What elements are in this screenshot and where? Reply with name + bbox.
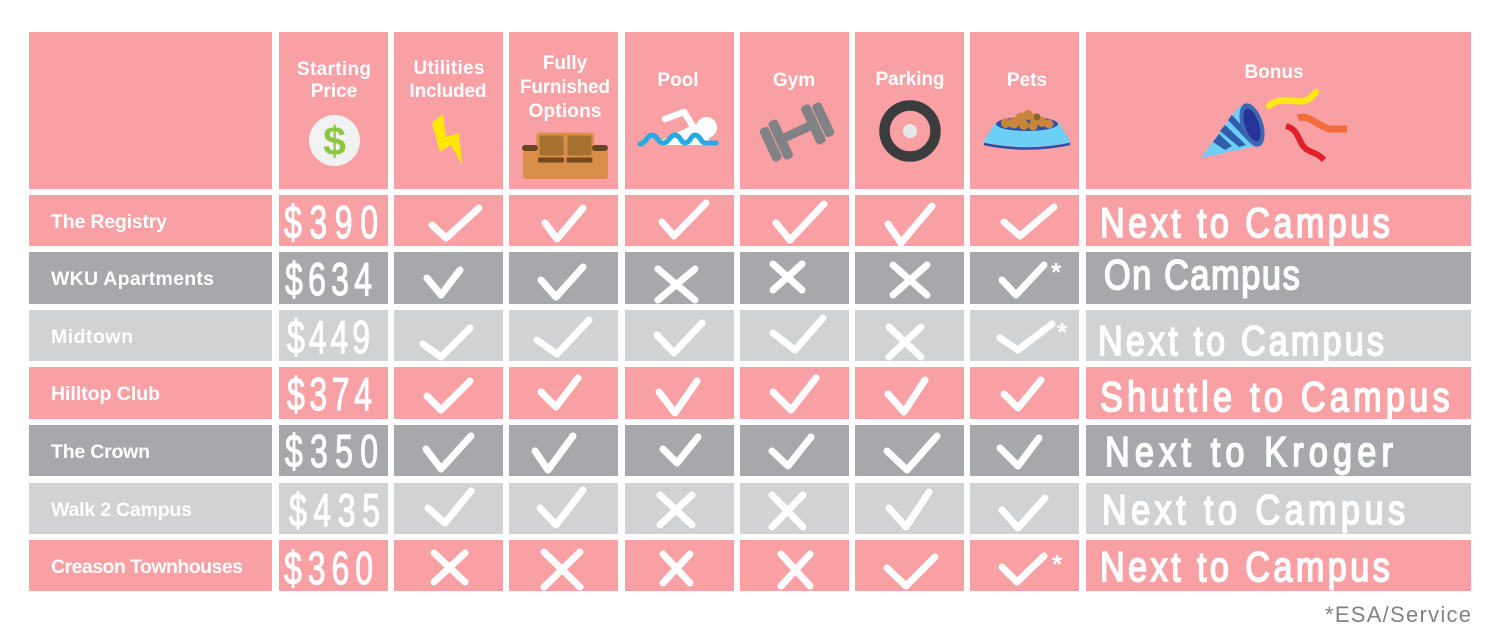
row: WKU Apartments: WKU Apartments [51,268,214,290]
column: gym: Gym [773,70,815,91]
marks: WKU Apartments [427,264,1044,300]
marks: The Registry [432,203,1054,243]
column: fully furnished options [509,32,618,189]
row: Creason Townhouses: Next to Campus [1100,545,1390,591]
icon: dumbbell [757,99,837,165]
column: fully furnished options: Options [528,101,602,122]
row: Midtown [29,310,1471,365]
row: The Registry: Next to Campus [1100,201,1390,247]
row: The Crown: $350 [285,426,378,477]
row: The Registry: The Registry [51,211,167,233]
row: Hilltop Club: Shuttle to Campus [1100,375,1450,421]
icon: couch [522,132,608,179]
column: starting price: Starting [297,59,371,80]
column: gym [740,32,849,189]
column: utilities included: Utilities [414,58,484,79]
row: Walk 2 Campus: Next to Campus [1102,488,1405,534]
icon: party popper [1201,92,1347,160]
header row [29,32,1471,189]
marks: Creason Townhouses [434,552,1044,587]
marks: Midtown [423,318,1052,357]
footnote: *ESA/Service [1325,602,1471,627]
icon: tire [884,106,936,156]
row: Hilltop Club: $374 [287,369,372,420]
icon: swimmer [640,112,717,145]
column: bonus: Bonus [1244,62,1304,83]
icon: pet food bowl [983,110,1071,148]
row: Hilltop Club: Hilltop Club [51,383,160,405]
column: parking [855,32,964,189]
column: pets [970,32,1079,189]
row: Midtown: Next to Campus [1098,319,1384,365]
column: bonus [1086,32,1471,189]
marks: The Crown [426,436,1039,470]
row: Creason Townhouses [29,540,1471,594]
row: Walk 2 Campus: Walk 2 Campus [51,499,192,521]
column: fully furnished options: Furnished [520,77,610,98]
row: Midtown: $449 [287,312,370,363]
icon: dollar coin [309,115,360,166]
row: WKU Apartments: $634 [285,254,372,305]
row: Midtown: * [1057,317,1068,347]
column: parking: Parking [876,69,944,90]
row: Creason Townhouses: $360 [284,543,373,594]
row: The Registry [29,195,1471,248]
row: The Crown [29,425,1471,477]
row: Walk 2 Campus: $435 [289,485,380,536]
column: fully furnished options: Fully [543,53,588,74]
column: starting price [279,32,388,189]
marks: Walk 2 Campus [428,490,1045,528]
row: The Crown: The Crown [51,441,150,463]
column: pool [625,32,734,189]
icon: lightning bolt [432,114,462,165]
row: WKU Apartments: * [1051,257,1062,287]
row: The Registry: $390 [284,197,378,248]
column: pool: Pool [657,70,699,91]
row: WKU Apartments: On Campus [1104,253,1300,299]
column: utilities included [394,32,503,189]
column: utilities included: Included [410,81,486,102]
row: The Crown: Next to Kroger [1105,430,1393,476]
marks: Hilltop Club [427,378,1041,413]
row: WKU Apartments [29,252,1471,305]
row: Creason Townhouses: * [1052,549,1063,579]
icon: dollar coin: $ [323,118,346,164]
row: Creason Townhouses: Creason Townhouses [51,556,243,578]
row: Midtown: Midtown [51,326,133,348]
column: starting price: Price [311,81,357,102]
row: Walk 2 Campus [29,483,1471,536]
column: pets: Pets [1007,70,1047,91]
row: Hilltop Club [29,367,1471,421]
